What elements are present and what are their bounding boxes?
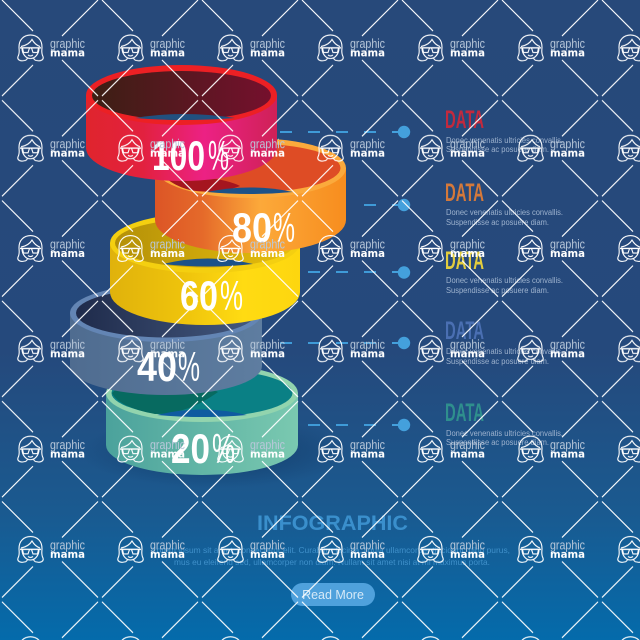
data block: teal: Donec venenatis ultricies convallis. (446, 429, 563, 438)
read more button: Read More (302, 588, 364, 602)
label: 20%: 20 (171, 425, 210, 472)
label: 20%: % (212, 425, 235, 472)
percentage labels (137, 132, 295, 472)
read more button (291, 583, 375, 606)
data block: teal: Suspendisse ac posuere diam. (446, 438, 549, 447)
data block: blue (445, 317, 563, 366)
data block: orange: Donec venenatis ultricies convallis. (446, 208, 563, 217)
label: 60%: 60 (180, 272, 218, 319)
description text (152, 545, 510, 567)
data block: teal: DATA (445, 399, 484, 427)
label: 40%: % (178, 343, 200, 390)
label: 100%: 100 (152, 132, 205, 179)
data block: blue: Donec venenatis ultricies convallis. (446, 347, 563, 356)
data block: yellow: Donec venenatis ultricies convallis. (446, 276, 563, 285)
label: 80%: % (273, 204, 295, 251)
data block: blue: DATA (445, 317, 484, 345)
data block: yellow: Suspendisse ac posuere diam. (446, 286, 549, 295)
data block: yellow (445, 247, 563, 295)
label: 80%: 80 (232, 204, 272, 251)
data block: orange: Suspendisse ac posuere diam. (446, 218, 549, 227)
data block: orange: DATA (445, 179, 484, 207)
connector lines and dots (280, 126, 410, 431)
data block: blue: Suspendisse ac posuere diam. (446, 357, 549, 366)
title: INFOGRAPHIC (257, 512, 408, 535)
ring: yellow 60% (110, 213, 300, 325)
description text: mus eu eleifend sed, ullamcorper non diam. Nullam sit amet nisi at mi maximus porta. (174, 557, 490, 567)
ring: slate 40% (70, 284, 262, 395)
data block: red: DATA (445, 106, 484, 134)
data block: yellow: DATA (445, 247, 484, 275)
description text: Lorem ipsum sit amet, consectetur elit. Curabitur lacinia, ligula ullamcorper tincidunt, nibh purus, (152, 545, 510, 555)
ground shadow (80, 416, 350, 488)
label: 40%: 40 (137, 343, 177, 390)
label: 60%: % (220, 272, 243, 319)
ring: red 100% (86, 65, 277, 181)
data block: red (445, 106, 563, 154)
data block: red: Suspendisse ac posuere diam. (446, 145, 549, 154)
ring: orange 80% (155, 138, 346, 253)
label: 100%: % (208, 132, 229, 179)
ring: teal 20% (106, 364, 298, 475)
data block: orange (445, 179, 563, 227)
data block: red: Donec venenatis ultricies convallis. (446, 136, 563, 145)
data block: teal (445, 399, 563, 447)
